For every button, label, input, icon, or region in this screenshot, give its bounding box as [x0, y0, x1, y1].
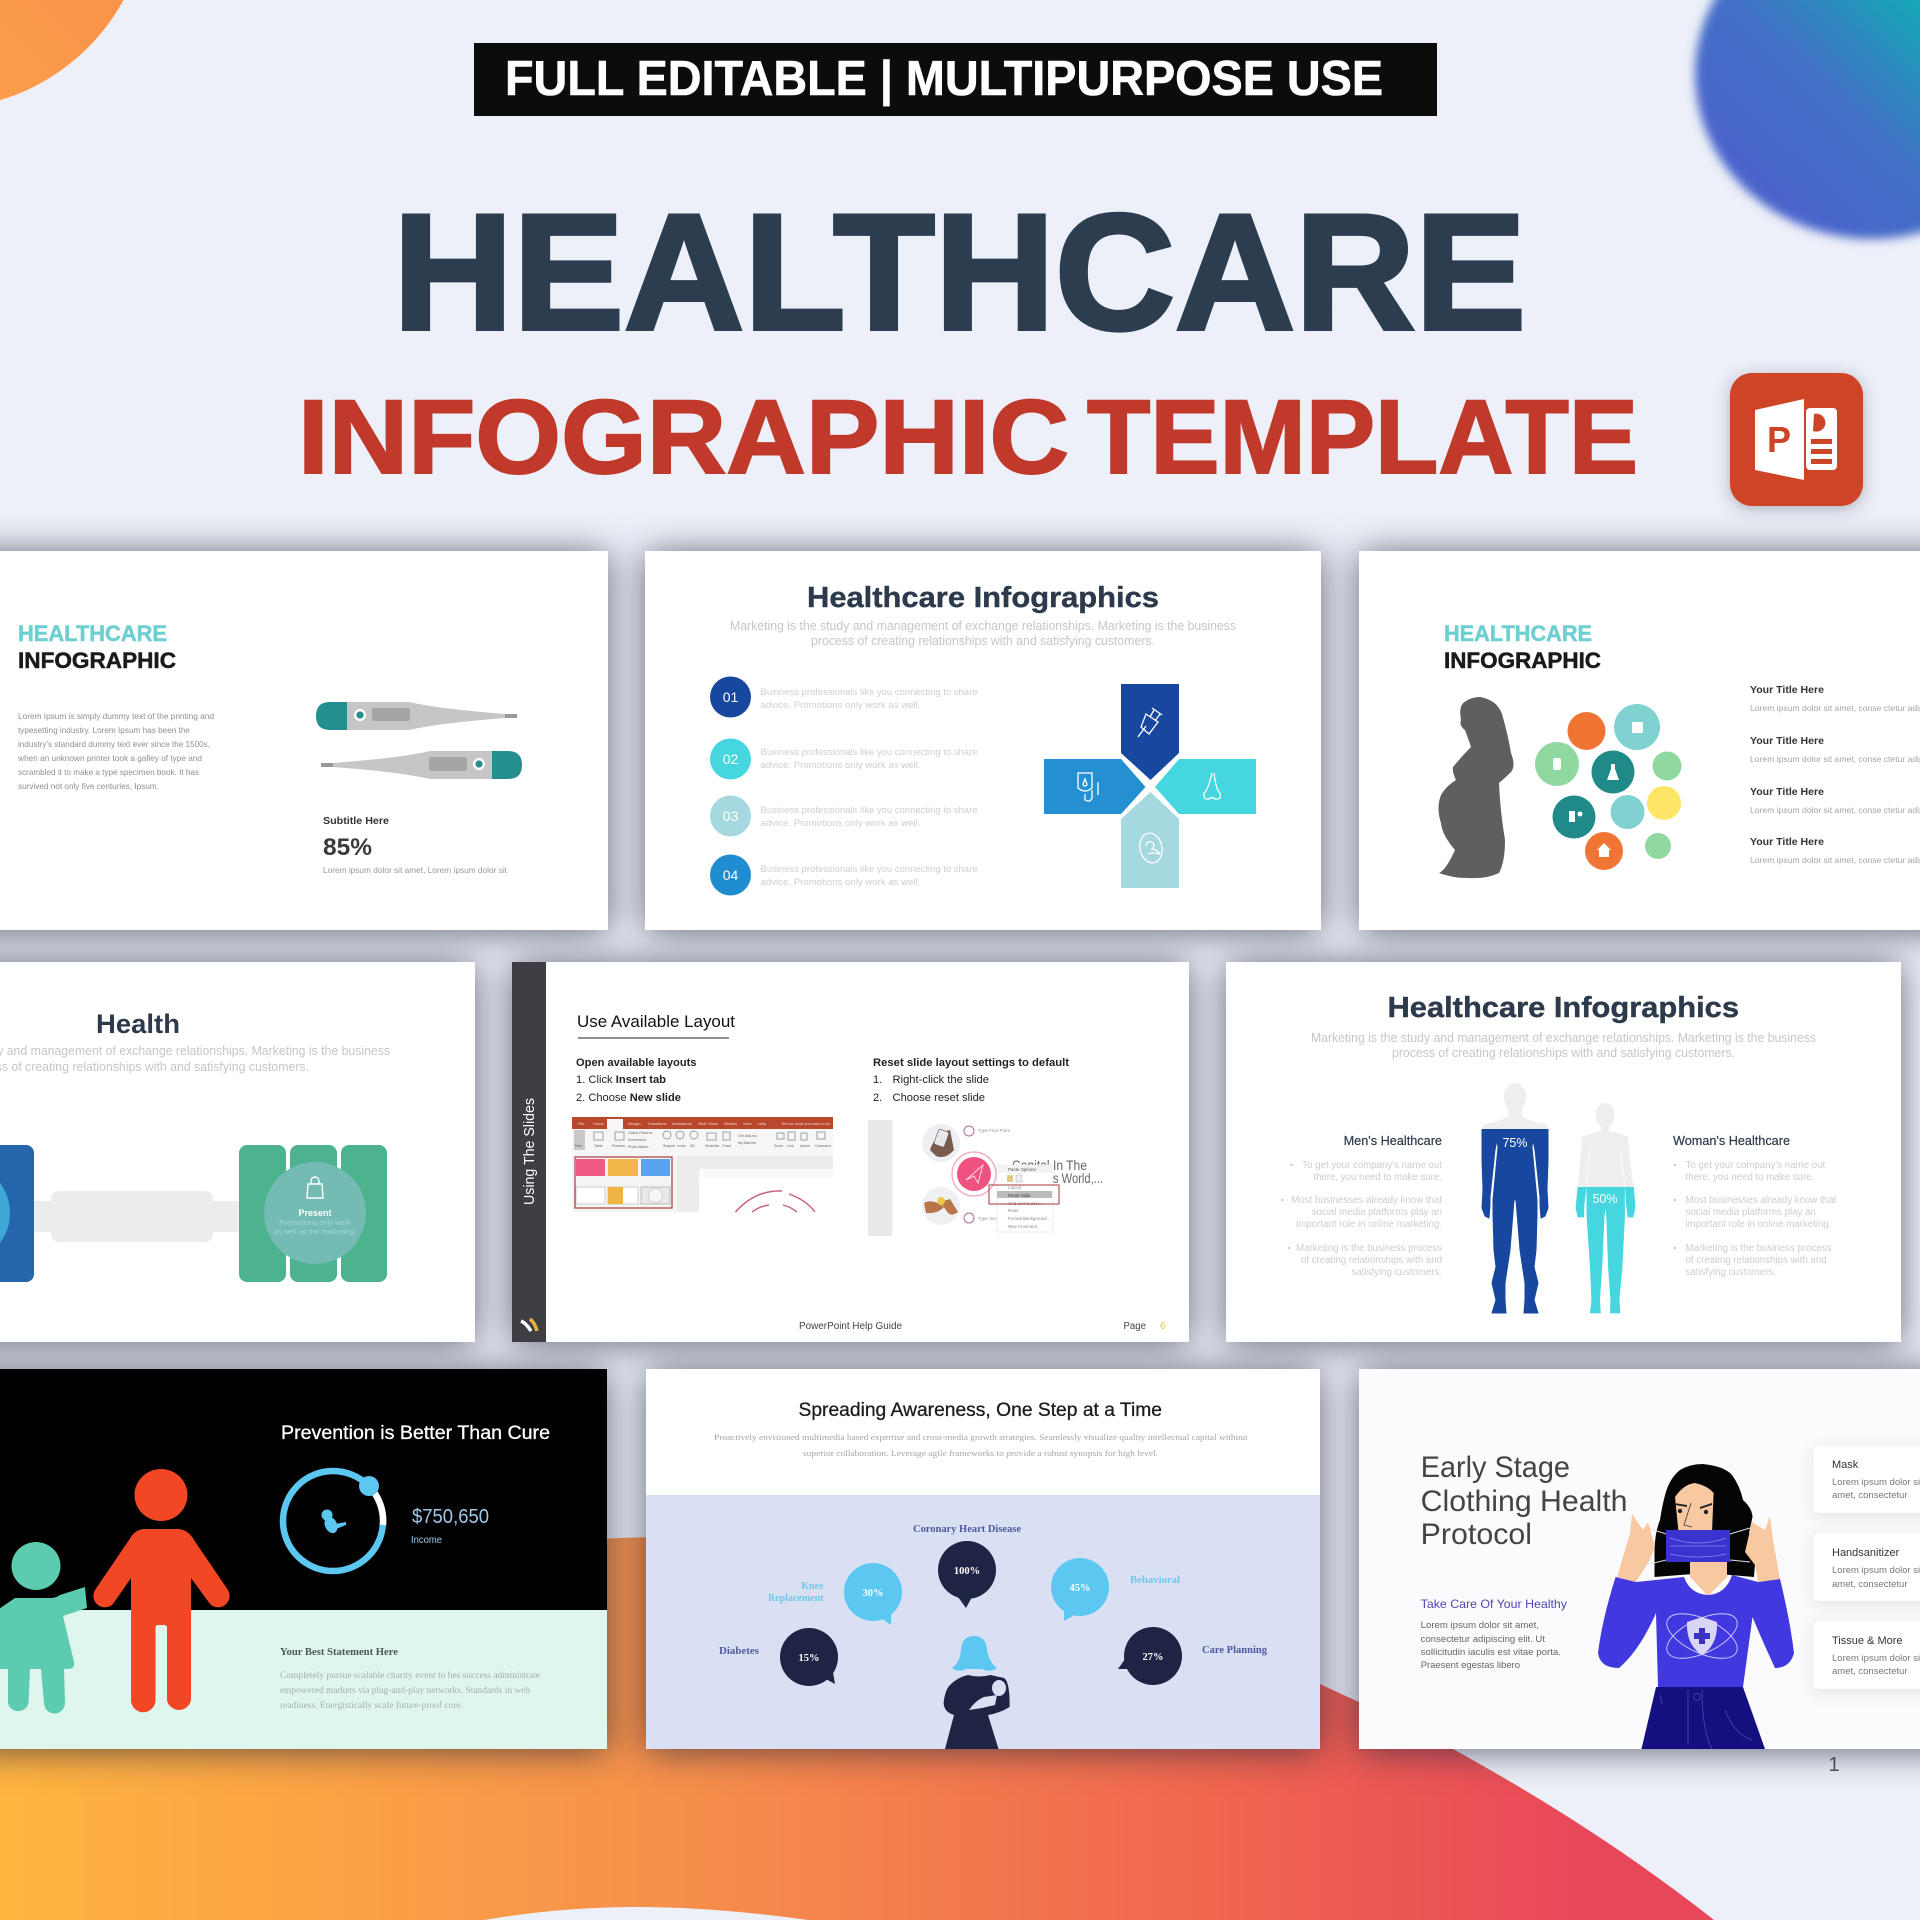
heading [1421, 1451, 1628, 1551]
card: mask [1814, 1446, 1920, 1513]
screenshot: powerpoint ribbon: My Add-ins [738, 1141, 756, 1145]
page number: 1 [1828, 1754, 1840, 1776]
column: men's healthcare: Men's Healthcare [1344, 1134, 1442, 1148]
footer: Page [1124, 1321, 1146, 1332]
screenshot: reset slide menu: Type First Point [978, 1128, 1011, 1133]
subheading: process of creating relationships with and satisfying customers. [811, 633, 1155, 648]
top-right blue blurred circle [1695, 0, 1920, 239]
screenshot: powerpoint ribbon: Photo Album [628, 1145, 648, 1149]
screenshot: powerpoint ribbon: Chart [722, 1144, 731, 1148]
column: men's healthcare: there, you need to make sure. [1313, 1172, 1442, 1183]
card: handsanitizer: amet, consectetur [1832, 1579, 1908, 1590]
footer: 6 [1160, 1321, 1166, 1332]
screenshot: powerpoint ribbon: Tell me what you want to do [781, 1121, 831, 1126]
text block: take care [1421, 1597, 1567, 1671]
screenshot: powerpoint ribbon: File [578, 1121, 585, 1126]
icon: thermometer bottom [321, 751, 522, 779]
subtitle: infographic template: INFOGRAPHIC [298, 379, 1069, 496]
card: mask: Mask [1832, 1459, 1859, 1471]
numbered list: Business professionals like you connecting to share [760, 747, 978, 758]
heading [1445, 625, 1601, 668]
green block: present: as well as the marketing. [274, 1227, 356, 1236]
icon: thermometer top [316, 702, 517, 730]
title list: Your Title Here [1750, 736, 1824, 747]
bubble chart: Replacement [768, 1593, 824, 1604]
bottom orange gradient wave [0, 1537, 1714, 1920]
body text: typesetting industry. Lorem Ipsum has been the [18, 725, 190, 735]
screenshot: powerpoint ribbon: 3D [690, 1144, 695, 1148]
footer: PowerPoint Help Guide [799, 1321, 902, 1332]
body text: scrambled it to make a type specimen book. It has [18, 767, 199, 777]
screenshot: reset slide menu: Grid and Guides... [1008, 1201, 1044, 1206]
screenshot: powerpoint ribbon: Online Pictures [628, 1131, 653, 1135]
statement text: Your Best Statement Here [280, 1647, 398, 1658]
instructions right: Choose reset slide [892, 1092, 985, 1104]
screenshot: reset slide menu: Ruler [1008, 1208, 1019, 1213]
column: men's healthcare: of creating relationships with and [1301, 1255, 1442, 1266]
numbered list: advice. Promotions only work as well. [760, 700, 920, 711]
numbered list: 01 [723, 689, 738, 705]
screenshot: powerpoint ribbon: Slide Show [698, 1121, 718, 1126]
screenshot: powerpoint ribbon: Link [787, 1144, 794, 1148]
heading: Protocol [1421, 1518, 1532, 1551]
screenshot: powerpoint ribbon: Zoom [774, 1144, 783, 1148]
column: woman's healthcare: Marketing is the business process [1686, 1243, 1832, 1254]
screenshot: powerpoint ribbon: New [575, 1144, 583, 1148]
column: men's healthcare: important role in online marketing. [1296, 1219, 1442, 1230]
text block: take care: Take Care Of Your Healthy [1421, 1597, 1567, 1611]
body text: Lorem Ipsum is simply dummy text of the printing and [18, 711, 214, 721]
stat: 85%: 85% [323, 834, 372, 861]
instructions left: 2. Choose New slide [576, 1092, 681, 1104]
subtitle: infographic template: TEMPLATE [1087, 379, 1638, 496]
subtitle: infographic template [298, 379, 1638, 496]
numbered list: 04 [723, 867, 738, 883]
instructions right [873, 1057, 1069, 1104]
heading: INFOGRAPHIC [1444, 648, 1601, 673]
stat: income: Income [411, 1534, 442, 1546]
bottom white bump [484, 1907, 808, 1920]
panel: slide spreading awareness [646, 1369, 1320, 1749]
screenshot: reset slide menu: Format Background... [1008, 1216, 1050, 1221]
banner: full editable: FULL EDITABLE | MULTIPURPOSE USE [505, 52, 1383, 106]
figure: woman 50%: 50% [1592, 1192, 1618, 1206]
title list: Your Title Here [1750, 787, 1824, 798]
screenshot: powerpoint ribbon: SmartArt [705, 1144, 719, 1148]
bubble chart: Behavioral [1130, 1575, 1180, 1586]
illustration: woman with mask [1598, 1464, 1794, 1749]
sidebar: Using The Slides [521, 1098, 538, 1205]
heading: HEALTHCARE [1444, 621, 1592, 646]
heading: Healthcare Infographics [807, 582, 1159, 614]
screenshot: powerpoint ribbon: Screenshot [628, 1138, 646, 1142]
bubble chart: Knee [801, 1581, 824, 1592]
body text: industry's standard dummy text ever since the 1500s, [18, 739, 210, 749]
text block: take care: consectetur adipiscing elit. Ut [1421, 1634, 1545, 1645]
screenshot: powerpoint ribbon: Icons [677, 1144, 686, 1148]
column: woman's healthcare: Most businesses already know that [1686, 1195, 1837, 1206]
heading: Clothing Health [1421, 1485, 1628, 1518]
column: woman's healthcare: of creating relationships with and [1686, 1255, 1827, 1266]
screenshot: reset slide menu [868, 1120, 1103, 1236]
panel: slide men and women [1282, 996, 1836, 1314]
subheading: Marketing is the study and management of exchange relationships. Marketing is the business [730, 618, 1236, 633]
panel: slide early stage clothing [1359, 1369, 1920, 1749]
bubble chart: 15% [798, 1653, 820, 1664]
title list: Your Title Here [1750, 685, 1824, 696]
numbered list: Business professionals like you connecting to share [760, 805, 978, 816]
subheading [731, 620, 1236, 648]
connector [34, 1191, 239, 1242]
instructions left [576, 1057, 696, 1104]
statement text: empowered markets via plug-and-play networks. Standards in web [280, 1686, 530, 1696]
screenshot: powerpoint ribbon: Shapes [663, 1144, 675, 1148]
column: men's healthcare [1282, 1134, 1442, 1278]
bubble chart [719, 1524, 1267, 1686]
bubble chart: 30% [862, 1588, 884, 1599]
statement text: Completely pursue scalable charity event to bes success administrate [280, 1671, 540, 1681]
column: woman's healthcare: important role in online marketing. [1686, 1219, 1831, 1230]
body text [17, 711, 214, 791]
body text: when an unknown printer took a galley of type and [17, 753, 202, 763]
screenshot: reset slide menu: Paste Options: [1008, 1167, 1037, 1172]
circle cluster [1535, 704, 1682, 870]
screenshot: powerpoint ribbon: Action [800, 1144, 810, 1148]
column: men's healthcare: satisfying customers. [1352, 1267, 1442, 1278]
column: men's healthcare: Most businesses already know that [1291, 1195, 1442, 1206]
card: mask: amet, consectetur [1832, 1490, 1908, 1501]
panel: slide pregnancy [1438, 625, 1920, 878]
card: handsanitizer [1814, 1533, 1920, 1601]
bubble chart: Coronary Heart Disease [913, 1524, 1022, 1535]
stat: income [411, 1506, 489, 1546]
green block: present: Present [298, 1208, 332, 1218]
screenshot: powerpoint ribbon: Animations [672, 1121, 692, 1126]
screenshot: powerpoint ribbon: Home [593, 1121, 604, 1126]
heading: Spreading Awareness, One Step at a Time [798, 1399, 1162, 1421]
numbered list: advice. Promotions only work as well. [760, 877, 920, 888]
column: men's healthcare: Marketing is the business process [1296, 1243, 1442, 1254]
screenshot: powerpoint ribbon: Pictures [612, 1144, 625, 1148]
screenshot: powerpoint ribbon: Get Add-ins [738, 1134, 757, 1138]
panel: slide thermometers [18, 625, 522, 874]
panel: slide prevention [0, 1369, 607, 1749]
panel: slide numbered cross [710, 586, 1256, 896]
statement text: readiness. Energistically scale future-proof core. [280, 1700, 463, 1711]
heading: Health [96, 1009, 180, 1039]
stat: 85%: Lorem ipsum dolor sit amet, Lorem ipsum dolor sit [323, 865, 508, 875]
bubble chart: Diabetes [719, 1646, 759, 1657]
sidebar [512, 962, 546, 1342]
bubble chart: 100% [954, 1566, 980, 1577]
screenshot: powerpoint ribbon: View [743, 1121, 752, 1126]
top-left orange circle [0, 0, 149, 109]
instructions right: 1. [873, 1074, 882, 1086]
screenshot: powerpoint ribbon: Comment [815, 1144, 831, 1148]
subheading: superior collaboration. Leverage agile frameworks to provide a robust synopsis for high level. [803, 1448, 1158, 1458]
footer [800, 1322, 1166, 1331]
screenshot: powerpoint ribbon: Table [594, 1144, 603, 1148]
figure: child [0, 1542, 87, 1714]
figure: man 75% [1482, 1083, 1548, 1313]
figure: mother and baby [944, 1636, 1010, 1749]
screenshot: reset slide menu: New Comment [1008, 1224, 1038, 1229]
text block: take care: Lorem ipsum dolor sit amet, [1421, 1620, 1539, 1631]
column: woman's healthcare: satisfying customers. [1686, 1267, 1776, 1278]
cross diagram [1044, 684, 1256, 888]
subheading: Marketing is the study and management of exchange relationships. Marketing is the business [1311, 1030, 1816, 1045]
card: tissue and more: Tissue & More [1832, 1635, 1903, 1647]
subheading: Proactively envisioned multimedia based expertise and cross-media growth strategies. Seamlessly visualize quality intellectual capital without [714, 1432, 1248, 1442]
body text: survived not only five centuries, Ipsum. [18, 781, 159, 791]
stat: income: $750,650 [412, 1506, 489, 1528]
text block: take care: sollicitudin iaculis est vitae porta. [1421, 1647, 1561, 1658]
screenshot: powerpoint ribbon: Review [724, 1121, 737, 1126]
instructions right: Reset slide layout settings to default [873, 1057, 1069, 1069]
title list [1750, 685, 1920, 865]
subheading: process of creating relationships with and satisfying customers. [1392, 1045, 1735, 1060]
icon: powerpoint: P [1767, 419, 1791, 460]
screenshot: reset slide menu: s World,... [1053, 1170, 1103, 1186]
column: woman's healthcare: there, you need to make sure. [1686, 1172, 1814, 1183]
instructions left: Open available layouts [576, 1057, 696, 1069]
panel: slide health flow [0, 1014, 390, 1282]
instructions left: 1. Click Insert tab [576, 1074, 666, 1086]
icon: powerpoint [1730, 373, 1863, 506]
ring gauge [283, 1471, 383, 1571]
screenshot: reset slide menu: Layout [1008, 1185, 1022, 1190]
screenshot: powerpoint ribbon [572, 1117, 833, 1212]
stat: 85%: Subtitle Here [323, 816, 389, 827]
title: healthcare: HEALTHCARE [393, 180, 1526, 364]
screenshot: powerpoint ribbon: Help [758, 1121, 767, 1126]
panel: slide use available layout [512, 962, 1189, 1342]
numbered list: advice. Promotions only work as well. [760, 818, 920, 829]
bubble chart: Care Planning [1202, 1645, 1267, 1656]
heading: Prevention is Better Than Cure [281, 1422, 550, 1444]
column: woman's healthcare: To get your company's name out [1686, 1160, 1826, 1171]
heading: Use Available Layout [577, 1012, 735, 1031]
text block: take care: Praesent egestas libero [1421, 1660, 1520, 1671]
heading: Healthcare Infographics [1388, 992, 1739, 1024]
numbered list: Business professionals like you connecting to share [760, 864, 978, 875]
numbered list [710, 676, 978, 896]
numbered list: 03 [723, 808, 738, 824]
card: tissue and more [1814, 1621, 1920, 1689]
column: woman's healthcare: Woman's Healthcare [1673, 1134, 1790, 1148]
title list: Your Title Here [1750, 837, 1824, 848]
numbered list: 02 [723, 751, 738, 767]
bubble chart: 27% [1142, 1652, 1164, 1663]
figure: adult [93, 1469, 230, 1712]
subheading [0, 1043, 390, 1074]
column: men's healthcare: social media platforms play an [1312, 1207, 1442, 1218]
bubble chart: 45% [1070, 1583, 1090, 1594]
column: men's healthcare: To get your company's name out [1302, 1160, 1442, 1171]
screenshot: powerpoint ribbon: Design [628, 1121, 640, 1126]
instructions right: Right-click the slide [892, 1074, 989, 1086]
stat: 85% [323, 816, 508, 875]
screenshot: reset slide menu: Capital In The [1012, 1157, 1087, 1173]
card: handsanitizer: Handsanitizer [1832, 1547, 1900, 1559]
heading: healthcare infographic: INFOGRAPHIC [18, 648, 176, 673]
statement text [280, 1647, 540, 1711]
heading: healthcare infographic [19, 625, 176, 668]
heading: healthcare infographic: HEALTHCARE [18, 621, 167, 646]
green block: present [239, 1145, 387, 1282]
numbered list: Business professionals like you connecting to share [760, 687, 978, 698]
card: tissue and more: amet, consectetur [1832, 1666, 1908, 1677]
pregnant silhouette [1438, 697, 1514, 878]
screenshot: reset slide menu: Reset Slide [1008, 1193, 1031, 1198]
column: woman's healthcare [1673, 1134, 1837, 1278]
instructions right: 2. [873, 1092, 882, 1104]
blue block [0, 1145, 34, 1282]
figure: woman 50% [1576, 1103, 1635, 1313]
screenshot: reset slide menu: Type Second [978, 1216, 1005, 1221]
green block: present: Promotions only work [279, 1218, 351, 1227]
figure: man 75%: 75% [1502, 1136, 1528, 1150]
subheading [714, 1432, 1248, 1458]
column: woman's healthcare: social media platforms play an [1686, 1207, 1816, 1218]
heading: Early Stage [1421, 1451, 1570, 1484]
numbered list: advice. Promotions only work as well. [760, 760, 920, 771]
subheading [1312, 1032, 1816, 1060]
screenshot: powerpoint ribbon: Transitions [647, 1121, 666, 1126]
